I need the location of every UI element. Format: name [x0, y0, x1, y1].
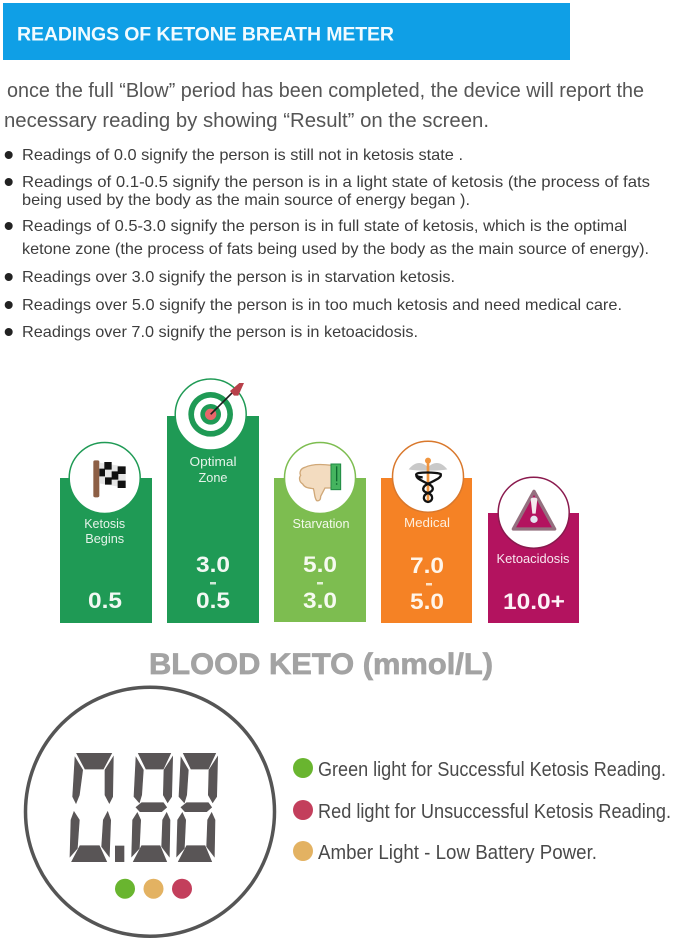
bar: medical: 5.0 [410, 589, 444, 614]
device display [26, 687, 274, 936]
bar: ketoacidosis: Ketoacidosis [496, 551, 570, 566]
bar: starvation: Starvation [292, 516, 350, 531]
status lights [115, 879, 192, 899]
bar: ketoacidosis: 10.0+ [503, 589, 565, 614]
bullet list of readings [5, 147, 650, 341]
icon: warning triangle [513, 491, 555, 529]
bar: optimal zone: Zone [198, 470, 228, 485]
legend [293, 758, 671, 864]
bullet list of readings: Readings over 7.0 signify the person is in ketoacidosis. [22, 324, 418, 341]
bar: medical: Medical [404, 515, 450, 530]
bullet list of readings: Readings over 5.0 signify the person is in too much ketosis and need medical care. [22, 297, 622, 314]
icon: target with arrow [188, 383, 244, 437]
bullet list of readings: ketone zone (the process of fats being used by the body as the main source of energy). [22, 241, 649, 258]
icon: checkered flag [93, 460, 126, 497]
chart caption: blood keto: BLOOD KETO (mmol/L) [149, 648, 493, 681]
intro text [4, 79, 644, 132]
intro text: necessary reading by showing “Result” on the screen. [4, 109, 489, 132]
bullet list of readings: Readings of 0.0 signify the person is still not in ketosis state . [22, 147, 463, 164]
bar: ketosis begins: 0.5 [88, 588, 122, 613]
intro text: once the full “Blow” period has been completed, the device will report the [7, 79, 644, 102]
bar: medical [381, 441, 472, 623]
bar: ketosis begins [60, 442, 152, 623]
bar: ketosis begins: Ketosis [84, 516, 126, 531]
bar: starvation: 3.0 [303, 588, 337, 613]
icon: caduceus [409, 458, 447, 502]
bar: medical: 7.0 [410, 553, 444, 578]
bar: optimal zone: Optimal [190, 454, 237, 469]
bar: ketosis begins: Begins [85, 531, 125, 546]
bar: optimal zone [167, 379, 259, 623]
bar: optimal zone: 3.0 [196, 552, 230, 577]
header banner [3, 3, 570, 60]
bullet list of readings: being used by the body as the main source of energy began ). [22, 192, 470, 209]
legend: Amber Light - Low Battery Power. [318, 842, 597, 864]
icon: thumbs down [300, 464, 341, 501]
bullet list of readings: Readings over 3.0 signify the person is in starvation ketosis. [22, 269, 455, 286]
bullet list of readings: Readings of 0.5-3.0 signify the person is in full state of ketosis, which is the optimal [22, 218, 627, 235]
bullet list of readings: Readings of 0.1-0.5 signify the person is in a light state of ketosis (the process of fats [22, 174, 650, 191]
bar: starvation: 5.0 [303, 552, 337, 577]
bar: starvation [274, 442, 366, 622]
digits 0.88 [70, 753, 218, 862]
bar: optimal zone: 0.5 [196, 588, 230, 613]
header banner: READINGS OF KETONE BREATH METER [17, 24, 394, 46]
bar: ketoacidosis [488, 477, 579, 623]
